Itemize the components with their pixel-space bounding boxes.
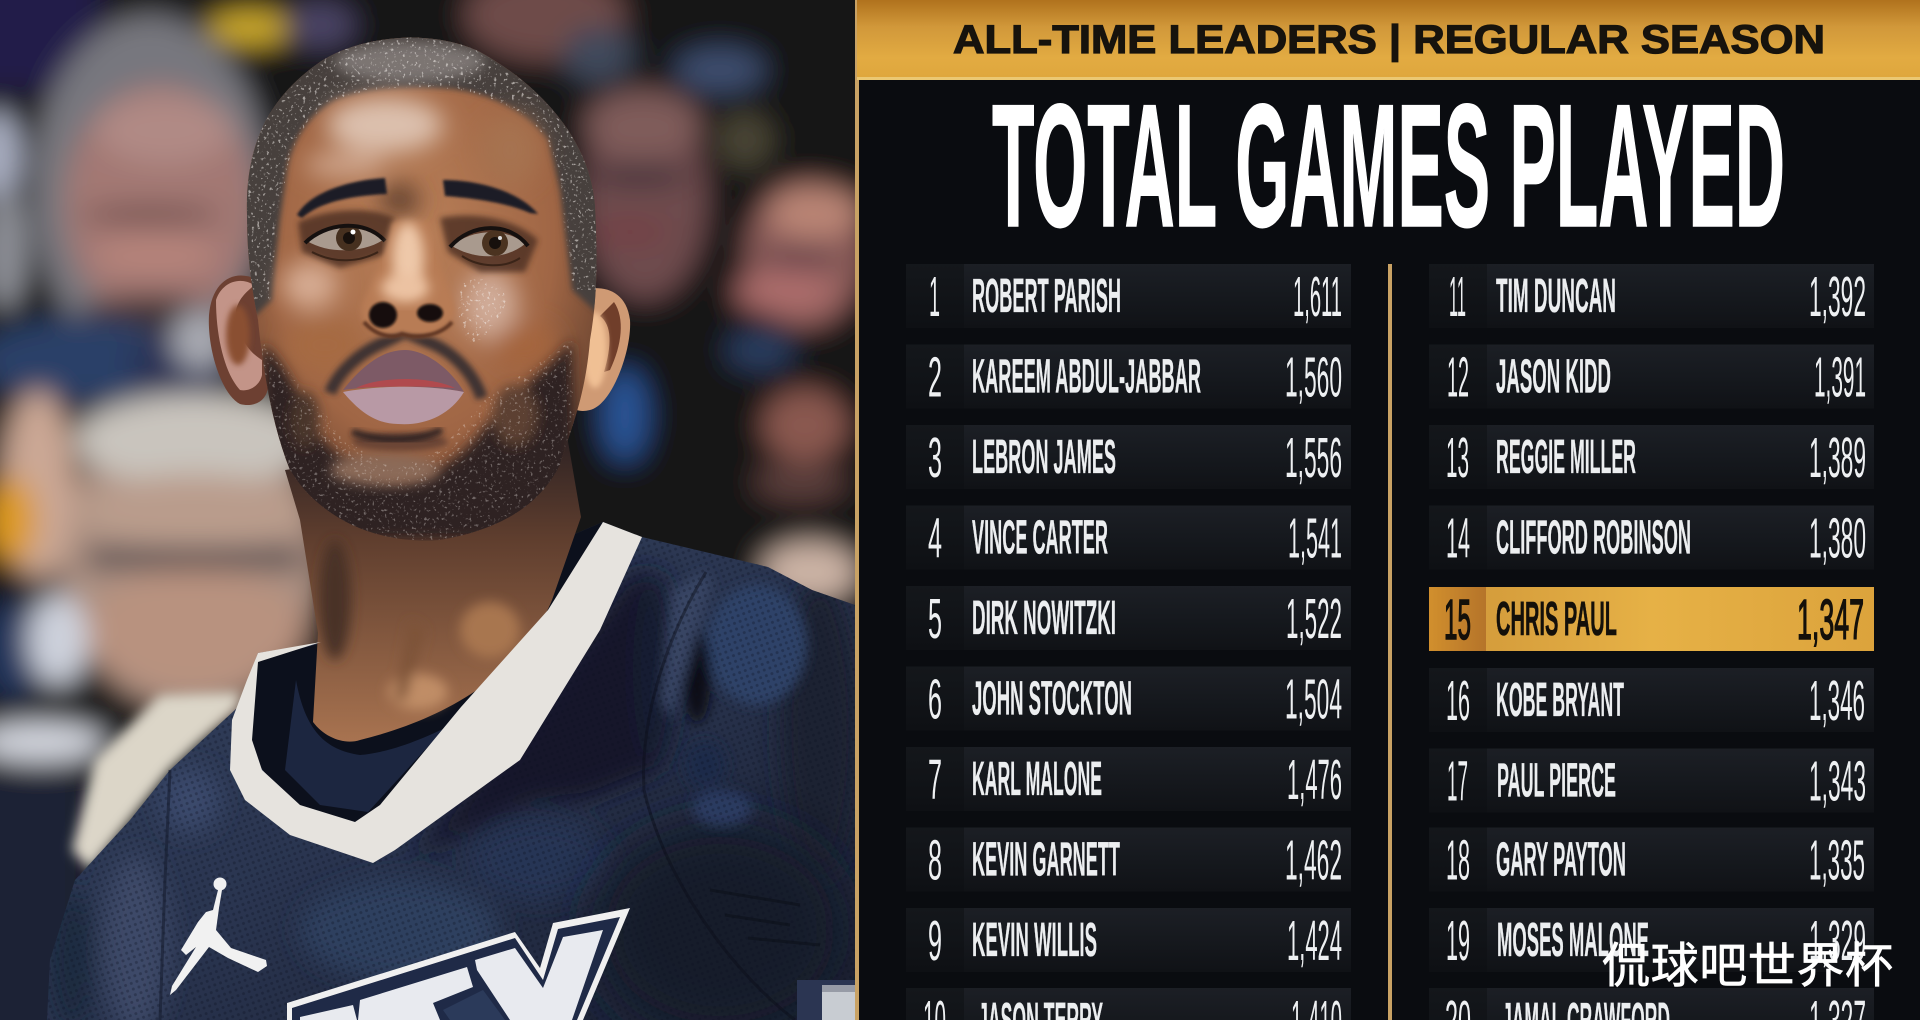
- text: 1,522: [1286, 587, 1342, 651]
- sleeve lower shadow: [590, 820, 850, 1020]
- jersey seams and creases: [160, 572, 820, 1020]
- row 17: 17: [1447, 750, 1468, 814]
- ear: right: [577, 288, 630, 411]
- left crowd: [0, 0, 100, 90]
- text: 1,560: [1285, 346, 1342, 410]
- moustache: [330, 332, 482, 398]
- row 8: KEVIN GARNETT: [972, 834, 1120, 886]
- row 11: TIM DUNCAN: [1496, 270, 1616, 323]
- row 14: 14: [1446, 506, 1470, 570]
- watermark: 侃球吧世界杯: [1602, 940, 1893, 993]
- row 13: 13: [1446, 426, 1469, 490]
- text: 1,611: [1293, 265, 1342, 329]
- text: 1,541: [1288, 506, 1342, 570]
- neck: [285, 430, 581, 742]
- row 12: [1429, 344, 1874, 410]
- beard: [262, 340, 575, 540]
- jersey lettering: [287, 908, 630, 1020]
- panel: player photo: [0, 0, 900, 1020]
- text: 1,424: [1287, 909, 1342, 973]
- skin light and shade: [282, 97, 557, 373]
- row 2: KAREEM ABDUL-JABBAR: [972, 350, 1201, 404]
- row 1: [906, 264, 1351, 329]
- row 4: VINCE CARTER: [972, 512, 1108, 564]
- row 12: JASON KIDD: [1496, 350, 1611, 404]
- row 18: [1429, 828, 1874, 892]
- jersey mesh texture: [47, 522, 855, 1020]
- row 8: [906, 828, 1351, 892]
- row 13: [1429, 425, 1874, 490]
- jersey body: [47, 522, 860, 1020]
- leaderboard: right column: [1429, 264, 1874, 1020]
- text: 1,504: [1285, 668, 1342, 732]
- row 5: [906, 586, 1351, 651]
- row 1: 1: [929, 265, 940, 329]
- row 7: 7: [928, 748, 942, 812]
- row 15: highlighted Chris Paul: 15: [1444, 588, 1471, 652]
- gold vertical edge line: [855, 0, 859, 1020]
- header band: [857, 0, 1920, 80]
- row 19: 19: [1446, 909, 1470, 973]
- row 11: 11: [1449, 265, 1466, 329]
- white blurred shoulder behind player: [72, 692, 240, 870]
- hair: [246, 38, 596, 318]
- undershirt: [248, 522, 603, 825]
- eyebrows: [297, 178, 538, 218]
- row 3: LEBRON JAMES: [972, 431, 1116, 484]
- row 1: ROBERT PARISH: [972, 270, 1121, 323]
- row 20: [1429, 988, 1874, 1020]
- row 12: 12: [1447, 346, 1469, 410]
- text: 1,476: [1287, 748, 1342, 812]
- row 8: 8: [928, 828, 942, 892]
- row 16: 16: [1446, 669, 1470, 733]
- subtitle: ALL-TIME LEADERS | REGULAR SEASON: [953, 18, 1825, 62]
- row 16: KOBE BRYANT: [1496, 674, 1624, 727]
- text: 1,556: [1285, 426, 1342, 490]
- row 3: [906, 425, 1351, 490]
- row 5: 5: [928, 587, 942, 651]
- row 17: [1429, 748, 1874, 814]
- blurred crowd background: [0, 0, 900, 1020]
- Jordan jumpman logo: [170, 878, 267, 995]
- ear: left: [209, 275, 268, 405]
- jersey tag: [797, 980, 855, 1020]
- row 10: [906, 988, 1351, 1020]
- row 7: KARL MALONE: [972, 753, 1102, 806]
- lips: [343, 350, 464, 424]
- sleeve and shadows: [48, 560, 860, 1020]
- neck shading: [319, 540, 520, 710]
- row 5: DIRK NOWITZKI: [972, 592, 1116, 645]
- column divider: [1388, 264, 1392, 1020]
- row 13: REGGIE MILLER: [1496, 431, 1636, 484]
- row 7: [906, 747, 1351, 812]
- right crowd: [465, 0, 625, 60]
- row 19: MOSES MALONE: [1497, 914, 1649, 967]
- row 3: 3: [928, 426, 942, 490]
- row 9: 9: [928, 909, 942, 973]
- eye sockets: [298, 210, 538, 272]
- row 17: PAUL PIERCE: [1497, 754, 1616, 808]
- row 4: 4: [928, 506, 942, 570]
- row 19: [1429, 908, 1874, 973]
- row 16: [1429, 668, 1874, 733]
- row 9: KEVIN WILLIS: [972, 914, 1097, 967]
- row 14: [1429, 506, 1874, 570]
- row 15: highlighted Chris Paul: [1429, 587, 1874, 652]
- eye: left: [305, 225, 385, 260]
- row 18: 18: [1446, 828, 1470, 892]
- row 2: 2: [928, 346, 942, 410]
- row 2: [906, 344, 1351, 410]
- head: [246, 38, 597, 540]
- row 6: [906, 666, 1351, 732]
- text: 1,462: [1285, 828, 1342, 892]
- eye: right: [450, 228, 528, 265]
- row 4: [906, 506, 1351, 570]
- white jersey collar: [230, 522, 642, 863]
- panel: stats background: [855, 0, 1920, 1020]
- row 15: highlighted Chris Paul: CHRIS PAUL: [1496, 593, 1617, 646]
- row 6: 6: [928, 668, 942, 732]
- nose: [362, 222, 455, 336]
- row 11: [1429, 264, 1874, 329]
- stubble specks: [240, 30, 610, 550]
- row 18: GARY PAYTON: [1496, 834, 1626, 886]
- leaderboard: left column: [906, 264, 1351, 1020]
- row 6: JOHN STOCKTON: [972, 672, 1132, 726]
- row 9: [906, 908, 1351, 973]
